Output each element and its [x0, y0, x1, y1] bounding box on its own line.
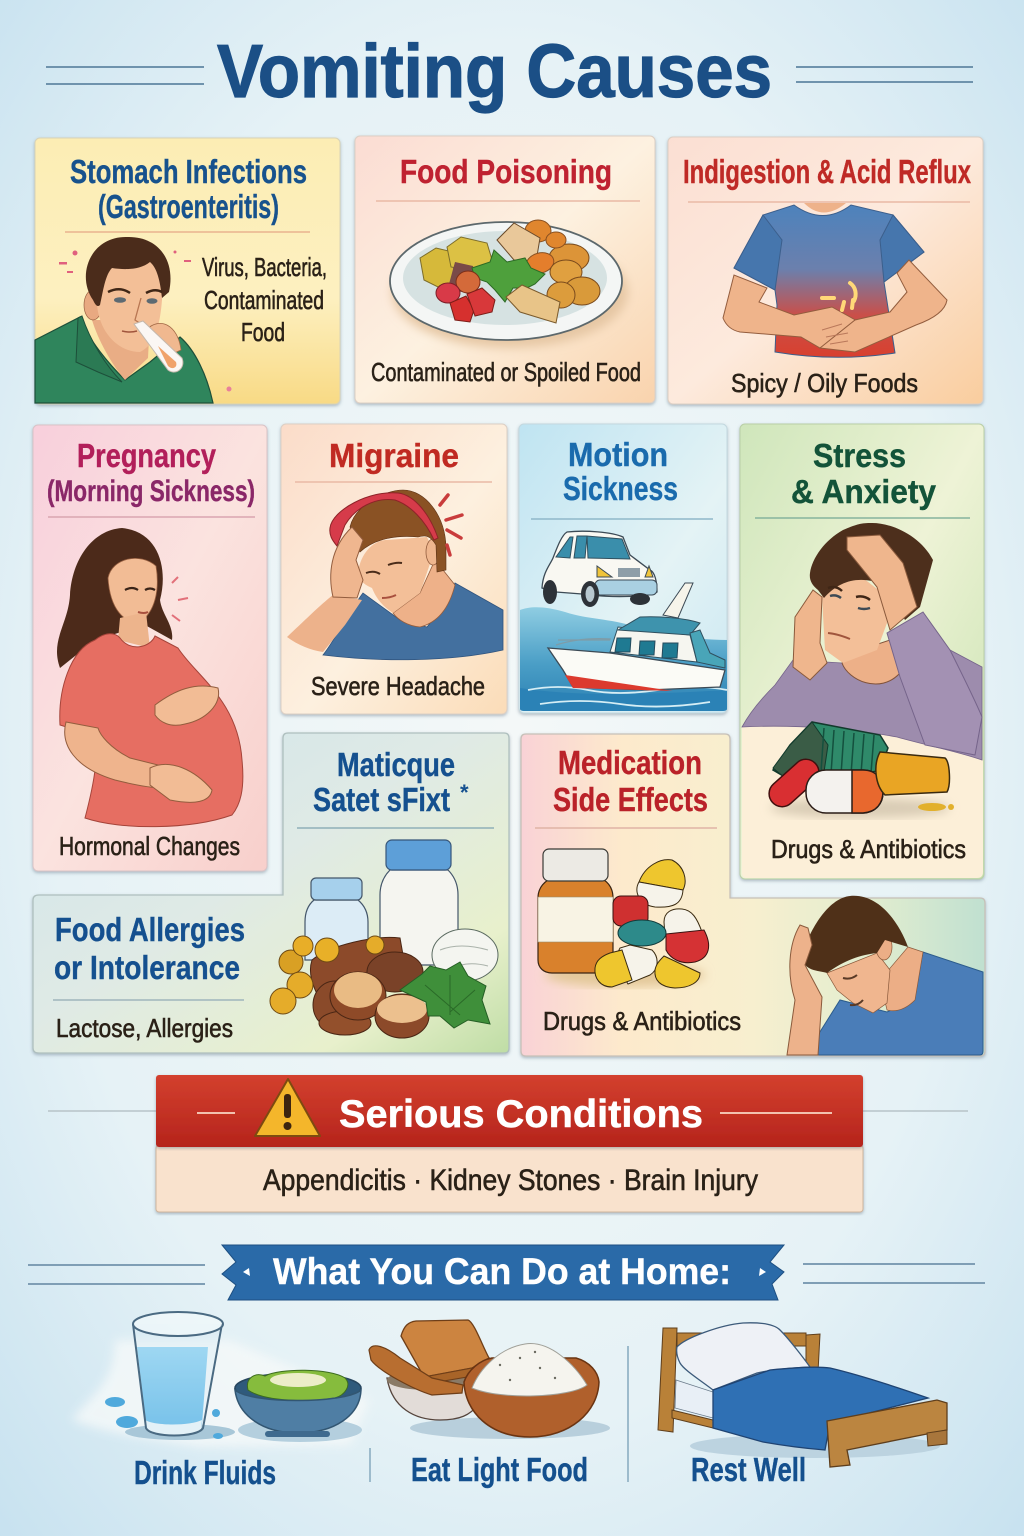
heading: motion sickness [563, 436, 678, 507]
icon: bowl of greens [235, 1370, 362, 1442]
icon: glass of water [105, 1312, 235, 1440]
text: spicy oily foods: Spicy / Oily Foods [731, 368, 918, 398]
text: contaminated or spoiled food: Contaminated or Spoiled Food [371, 357, 641, 387]
icon: bed with pillow [658, 1323, 947, 1467]
text: hormonal changes: Hormonal Changes [59, 831, 240, 861]
icon: toast and rice bowls [369, 1320, 610, 1439]
panel: stress and anxiety [740, 424, 984, 879]
heading: garbled label: Satet sFixt [313, 781, 450, 818]
text: stomach infections causes: Virus, Bacteria, [202, 252, 327, 282]
illustration: pills and box [764, 722, 954, 818]
heading: stress and anxiety: & Anxiety [791, 473, 937, 510]
heading: pregnancy [47, 437, 255, 508]
heading: pregnancy: (Morning Sickness) [47, 475, 255, 508]
banner: serious conditions [48, 1075, 968, 1212]
label: rest well: Rest Well [691, 1451, 806, 1488]
heading: garbled label: * [460, 780, 469, 805]
heading: motion sickness: Sickness [563, 470, 678, 507]
heading: stress and anxiety [791, 437, 937, 510]
heading: medication side effects [553, 744, 708, 818]
heading: stomach infections: (Gastroenteritis) [98, 188, 279, 225]
icon: warning triangle [255, 1079, 320, 1136]
text: drugs and antibiotics: Drugs & Antibiotics [771, 834, 966, 864]
heading: food allergies: or Intolerance [54, 949, 240, 986]
panel: food poisoning [355, 136, 655, 403]
heading: motion sickness: Motion [568, 436, 668, 473]
text: lactose allergies: Lactose, Allergies [56, 1013, 233, 1043]
panel: pregnancy [33, 425, 267, 871]
heading: garbled label: Maticque [337, 746, 455, 783]
heading: stress and anxiety: Stress [813, 437, 906, 474]
label: drink fluids: Drink Fluids [134, 1454, 276, 1491]
text: appendicitis, kidney stones, brain injury: Appendicitis · Kidney Stones · Brain Injury [263, 1164, 758, 1197]
panel: stomach infections [35, 138, 340, 404]
heading: stomach infections: Stomach Infections [70, 153, 307, 190]
panel: medication side effects [521, 734, 985, 1056]
heading: garbled label [313, 746, 469, 818]
illustration: bottles nuts and greens [270, 840, 498, 1038]
section: eat light food [369, 1320, 610, 1488]
heading: medication side effects: Medication [558, 744, 702, 781]
heading: migraine: Migraine [329, 437, 459, 474]
heading: food allergies: Food Allergies [55, 911, 245, 948]
illustration: stressed man [742, 523, 982, 760]
illustration: torso with stomach pain [723, 203, 947, 357]
text: stomach infections causes [202, 252, 327, 347]
panel: motion sickness [519, 424, 727, 713]
illustration: plate of food [390, 220, 628, 348]
text: drugs and antibiotics: Drugs & Antibiotics [543, 1006, 741, 1036]
panel: migraine [281, 424, 507, 714]
heading: medication side effects: Side Effects [553, 781, 708, 818]
section: rest well [658, 1323, 947, 1488]
ribbon: what you can do at home [28, 1245, 985, 1300]
heading: food allergies [54, 911, 245, 986]
illustration: man with thermometer [35, 237, 232, 403]
section: drink fluids [72, 1312, 370, 1491]
illustration: medicine bottle and pills [538, 849, 709, 988]
heading: pregnancy: Pregnancy [77, 437, 217, 474]
title: Vomiting Causes [217, 29, 772, 113]
illustration: car and boat [520, 531, 727, 711]
text: severe headache: Severe Headache [311, 671, 485, 701]
heading: food poisoning: Food Poisoning [400, 153, 612, 190]
label: eat light food: Eat Light Food [411, 1451, 588, 1488]
heading: serious conditions: Serious Conditions [339, 1093, 703, 1136]
panel: food allergies and intolerance [33, 733, 509, 1053]
title [46, 29, 973, 113]
text: stomach infections causes: Food [241, 317, 285, 347]
illustration: pregnant woman [57, 528, 243, 827]
panel: indigestion and acid reflux [668, 137, 983, 404]
text: stomach infections causes: Contaminated [204, 285, 324, 315]
heading: stomach infections [70, 153, 307, 225]
illustration: man holding head [787, 896, 983, 1055]
ribbon: what you can do at home: What You Can Do at Home: [273, 1251, 731, 1292]
illustration: man with migraine [287, 490, 503, 660]
